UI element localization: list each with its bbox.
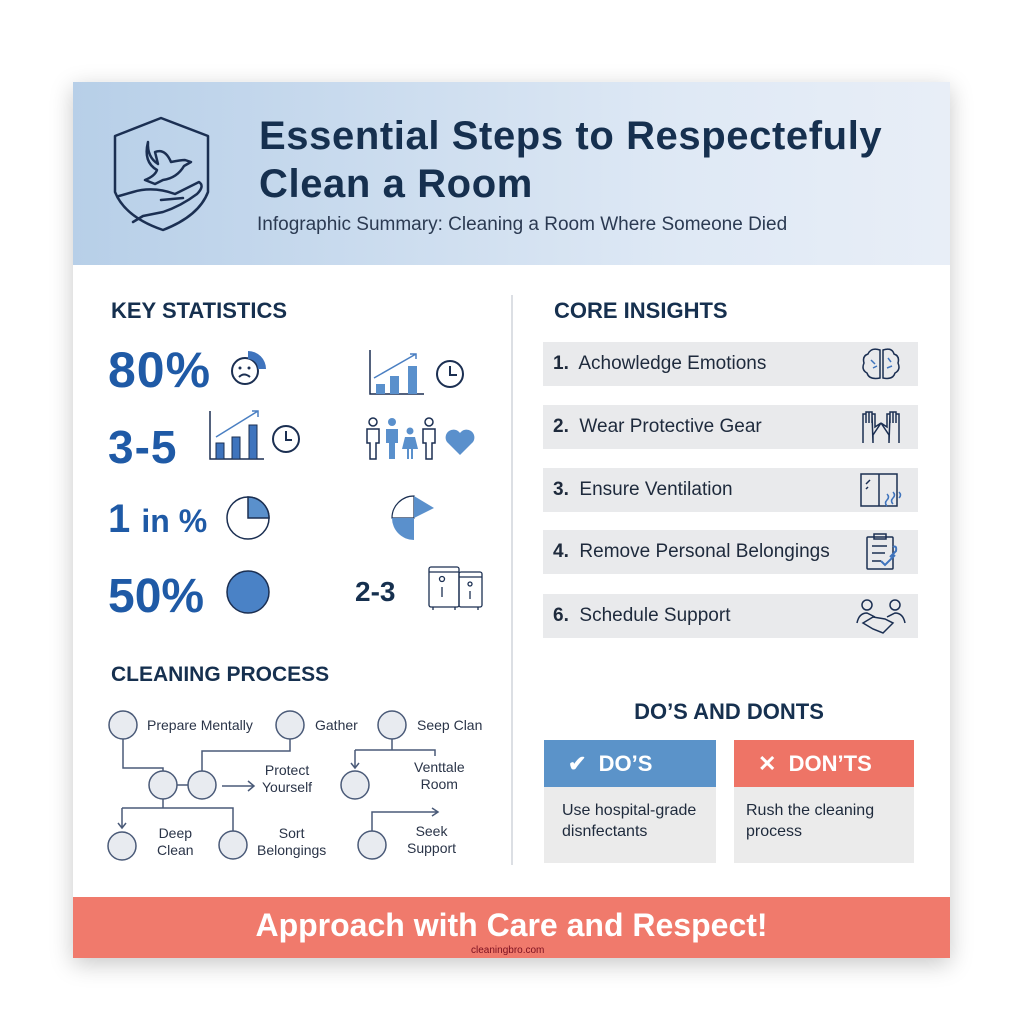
panel: cleaning process: Clean [157, 842, 194, 858]
icon: pie split [391, 495, 434, 540]
icon: shield with dove and hand [114, 116, 210, 232]
insight 5: 6. Schedule Support [553, 605, 730, 626]
stat 80%: 80% [108, 342, 211, 398]
panel: cleaning process: Deep [159, 825, 192, 841]
do's card: ✔ DO’S [568, 751, 652, 776]
title [259, 114, 882, 206]
subtitle: Infographic Summary: Cleaning a Room Where Someone Died [257, 214, 787, 235]
stat 2-3: 2-3 [355, 576, 395, 607]
icon: air purifiers [428, 566, 483, 610]
stat 1 in %: 1 in % [108, 497, 207, 541]
panel: cleaning process: Venttale [414, 759, 465, 775]
panel: cleaning process: Seek [416, 823, 447, 839]
icon: full circle [226, 570, 270, 614]
heading: CORE INSIGHTS [554, 298, 728, 323]
panel: cleaning process: Yourself [262, 779, 312, 795]
insight 1 [543, 342, 918, 386]
insight 5 [543, 594, 918, 638]
panel: cleaning process [107, 663, 482, 861]
panel: do's and don'ts [544, 699, 914, 863]
heading: CLEANING PROCESS [111, 663, 329, 686]
don'ts card [734, 740, 914, 863]
do's card: disnfectants [562, 823, 647, 840]
panel: cleaning process: Seep Clan [417, 717, 482, 733]
don'ts card: Rush the cleaning [746, 802, 874, 819]
do's card [544, 740, 716, 863]
icon: bar chart and clock [369, 350, 464, 395]
panel: key statistics [108, 298, 483, 623]
panel: cleaning process: Gather [315, 717, 358, 733]
stat 3-5: 3-5 [108, 421, 177, 473]
heading: DO’S AND DONTS [634, 699, 824, 724]
divider [511, 295, 513, 865]
insight 4: 4. Remove Personal Belongings [553, 541, 830, 562]
stat 50%: 50% [108, 570, 204, 623]
step labels: Prepare Mentally [147, 717, 253, 733]
icon: bar chart and clock 2 [209, 410, 300, 460]
source: cleaningbro.com [471, 945, 544, 956]
panel: cleaning process: Support [407, 840, 456, 856]
icon: pie quarter [226, 496, 270, 540]
footer banner [73, 897, 950, 958]
footer banner: Approach with Care and Respect! [255, 907, 768, 943]
panel: cleaning process: Belongings [257, 842, 326, 858]
heading: KEY STATISTICS [111, 298, 287, 323]
icon: sad face [231, 351, 266, 385]
insight 4 [543, 530, 918, 574]
insight 3: 3. Ensure Ventilation [553, 479, 733, 500]
insight 3 [543, 468, 918, 512]
title: Essential Steps to Respectefuly [259, 114, 882, 158]
don'ts card: ✕ DON’TS [758, 751, 872, 776]
header band [73, 82, 950, 265]
panel: cleaning process: Protect [265, 762, 309, 778]
don'ts card: process [746, 823, 802, 840]
title: Clean a Room [259, 162, 533, 206]
insight 1: 1. Achowledge Emotions [553, 353, 766, 374]
do's card: Use hospital-grade [562, 802, 696, 819]
panel: cleaning process: Sort [279, 825, 304, 841]
insight 2 [543, 405, 918, 449]
flow diagram [107, 710, 440, 861]
icon: family and heart [366, 417, 474, 460]
insight 2: 2. Wear Protective Gear [553, 416, 762, 437]
panel: cleaning process: Room [421, 776, 458, 792]
card [73, 82, 950, 958]
